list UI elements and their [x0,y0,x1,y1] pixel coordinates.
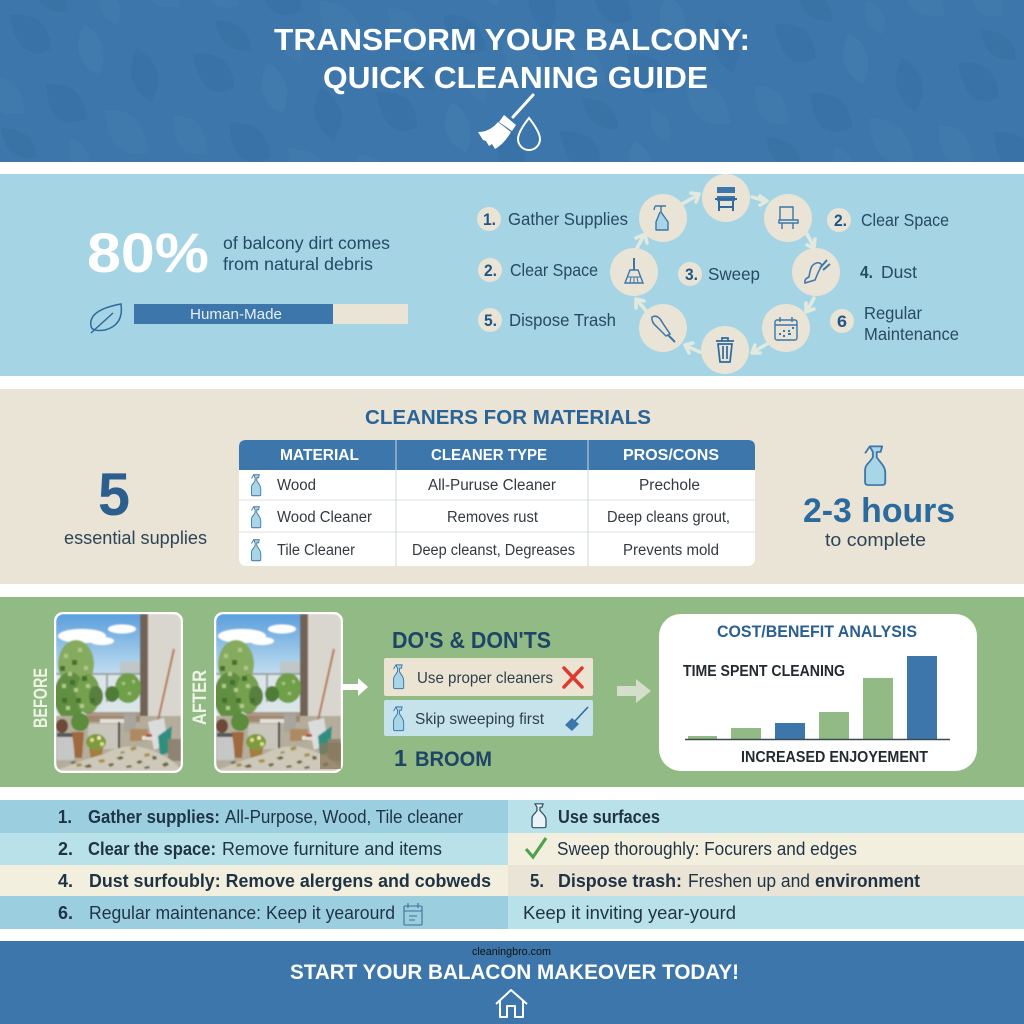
row 1 left: 1. [58,807,72,827]
title: TRANSFORM YOUR BALCONY: [274,22,750,57]
row 4 left: 6. [58,903,73,923]
chart x label: INCREASED ENJOYEMENT [741,749,928,766]
arrow: to chart [617,679,651,703]
row 2 right: Sweep thoroughly: Focurers and edges [557,839,857,859]
title [274,22,750,95]
stat description: of balcony dirt comes [223,233,390,253]
do/don't item: skip sweeping first [384,700,593,736]
call to action: START YOUR BALACON MAKEOVER TODAY! [290,960,739,984]
stat: 5 essential supplies: 5 [98,461,130,528]
stat description [223,233,390,274]
stat description: from natural debris [223,254,373,274]
stat: 2-3 hours to complete [803,492,955,550]
stat: 2-3 hours to complete: to complete [825,529,926,550]
photo: before [54,612,183,773]
label: 2 clear space right: 2. [834,211,847,230]
label: 4 dust: Dust [881,262,917,282]
step: chair [702,174,750,222]
row 2 left [58,839,442,859]
stat: 2-3 hours to complete: 2-3 hours [803,492,955,530]
table row: wood cleaner [251,507,730,528]
label: 3 sweep: 3. [685,265,698,284]
big stat: 80%: 80% [87,221,209,284]
icon: spray bottle [865,446,885,485]
label: 6 regular maintenance: Maintenance [864,324,959,344]
cycle arrows [636,193,815,353]
step: calendar [762,304,810,352]
footer url: cleaningbro.com [472,946,551,958]
row 1 left [58,807,463,827]
panel: footer [0,941,1024,1024]
label: 2 clear space left: Clear Space [510,260,598,280]
title: QUICK CLEANING GUIDE [323,60,708,95]
panel: statistics and process cycle [0,174,1024,376]
label: 5 dispose trash: Dispose Trash [509,310,616,330]
step: dusting [792,248,840,296]
do/don't item: skip sweeping first: Skip sweeping first [415,711,545,728]
progress bar: human-made: Human-Made [190,306,282,323]
table row: tile cleaner [251,540,719,561]
stat: 5 essential supplies [64,461,207,548]
panel: before and after, do's and don'ts, cost benefit [0,597,1024,787]
step: folding table [764,194,812,242]
section heading: CLEANERS FOR MATERIALS [365,406,651,429]
label: 1 gather supplies [477,207,628,231]
label: 1 gather supplies: Gather Supplies [508,209,628,229]
label: 4 dust [860,262,917,282]
label: 2 clear space right [827,208,949,232]
label: 6 regular maintenance [830,303,959,344]
row 3 right [530,871,920,891]
label: 2 clear space left: 2. [484,261,497,280]
panel: cleaners for materials [0,389,1024,584]
row 2 left: 2. [58,839,73,859]
table [239,440,755,566]
table header [280,447,719,464]
table row: tile cleaner: Prevents mold [623,542,719,559]
icon: calendar [404,903,422,925]
table header: PROS/CONS [623,447,719,464]
label: 2 clear space left [478,258,598,282]
do/don't item: use proper cleaners: Use proper cleaners [417,670,553,687]
label: 1 broom [394,745,492,771]
row 1 left: Gather supplies: [88,807,220,827]
panel: cost/benefit chart [659,614,977,771]
chart y label: TIME SPENT CLEANING [683,663,845,680]
table row: tile cleaner: Deep cleanst, Degreases [412,542,575,559]
row 4 right: Keep it inviting year-yourd [523,903,736,923]
progress bar: human-made [134,304,408,324]
table row: wood [251,475,700,496]
table row: wood: Prechole [639,477,700,494]
icon: small broom [565,707,588,731]
chart title: COST/BENEFIT ANALYSIS [717,623,917,641]
label: 1 broom: BROOM [415,748,492,771]
table row: wood cleaner: Wood Cleaner [277,509,372,526]
row 2 left: Remove furniture and items [222,839,442,859]
label: after: AFTER [190,670,211,725]
label: 1 broom: 1 [394,745,407,771]
photo: after [214,612,343,773]
row 3 right: Dispose trash: [558,871,682,891]
row 1 right: Use surfaces [558,807,660,827]
row 1 right [532,804,660,828]
panel: step list [0,800,1024,929]
row 3 left: 4. [58,871,73,891]
step: broom [610,248,658,296]
row 3 right: Freshen up and [688,871,810,891]
table row: wood cleaner: Deep cleans grout, [607,509,730,526]
row 3 left: Dust surfoubly: Remove alergens and cobweds [89,871,491,891]
label: 3 sweep: Sweep [708,264,760,284]
heading: do's and don'ts: DO'S & DON'TS [392,627,551,653]
icon: broom and water drop [478,95,540,150]
icon: house [496,990,527,1017]
label: 1 gather supplies: 1. [483,210,496,229]
label: before: BEFORE [31,668,52,728]
bar chart [685,656,950,740]
row 2 left: Clear the space: [88,839,216,859]
process cycle [477,174,959,374]
table header: CLEANER TYPE [431,447,547,464]
icon: leaf [91,304,121,333]
row 4 left: Regular maintenance: Keep it yearourd [89,903,395,923]
label: 3 sweep [678,262,760,286]
row 3 right: 5. [530,871,544,891]
step: trash can [701,326,749,374]
table row: wood: All-Puruse Cleaner [428,477,556,494]
table row: wood cleaner: Removes rust [447,509,539,526]
table row: wood: Wood [277,477,316,494]
row 3 right: environment [815,871,920,891]
label: 5 dispose trash: 5. [484,311,497,330]
stat: 5 essential supplies: essential supplies [64,527,207,548]
arrow: photo to do's [343,678,368,696]
label: 2 clear space right: Clear Space [861,210,949,230]
icon: red cross [564,668,582,687]
panel: header [0,0,1024,162]
do/don't item: use proper cleaners [384,658,593,696]
label: 6 regular maintenance: 6 [837,312,847,331]
row 1 left: All-Purpose, Wood, Tile cleaner [225,807,463,827]
table row: tile cleaner: Tile Cleaner [277,542,355,559]
step: spray bottle [639,194,687,242]
label: 6 regular maintenance: Regular [864,303,922,323]
table header: MATERIAL [280,447,359,464]
step: duster [639,304,687,352]
label: 4 dust: 4. [860,262,873,282]
label: 5 dispose trash [478,308,616,332]
